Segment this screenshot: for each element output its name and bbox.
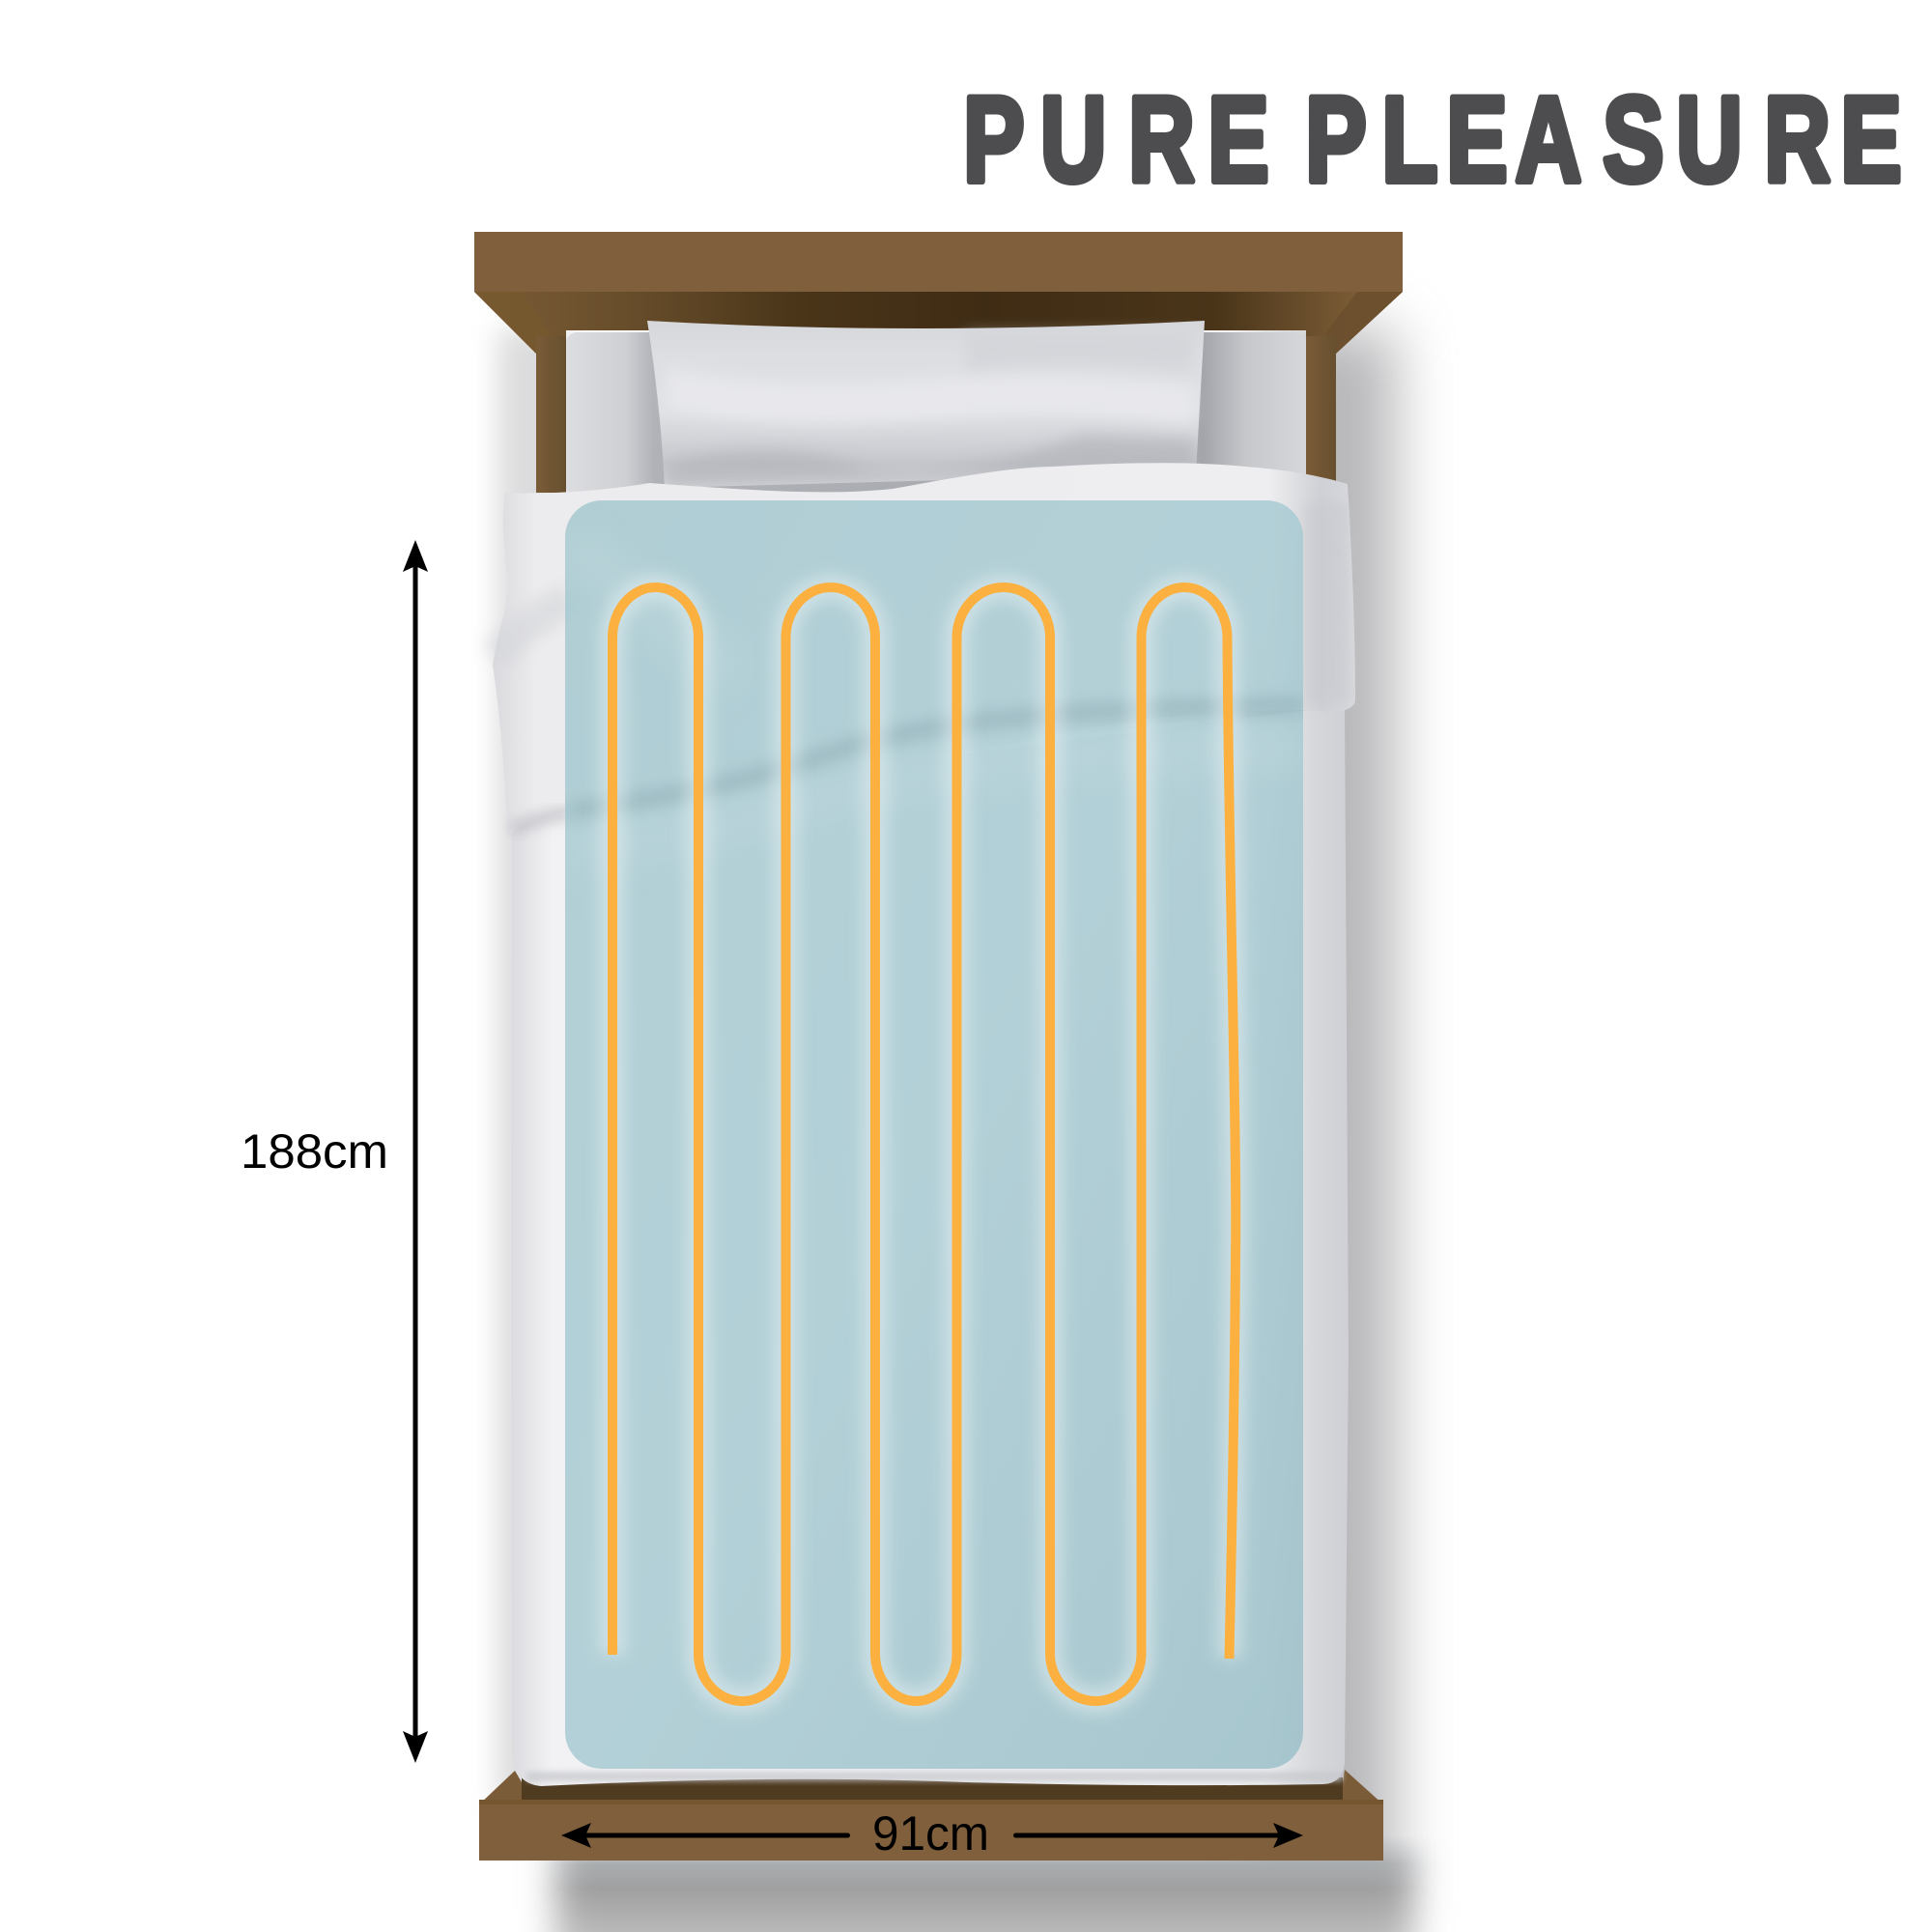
duvet fold [493, 463, 1355, 836]
duvet hem shading [526, 1772, 1343, 1781]
heated blanket panel [565, 500, 1303, 1769]
pillow [647, 321, 1205, 488]
panel wrinkles [565, 541, 1303, 1748]
mattress [566, 332, 1306, 497]
bed illustration [474, 232, 1410, 1932]
duvet body [511, 705, 1349, 1786]
bed shadow [497, 328, 1410, 1932]
height arrow [403, 540, 428, 1763]
title: PURE PLEASURE [963, 72, 1902, 208]
width arrow right [1013, 1823, 1303, 1848]
headboard [474, 232, 1403, 493]
height label: 188cm [241, 1124, 388, 1179]
width arrow left [561, 1823, 850, 1848]
footboard [479, 1770, 1383, 1861]
width label: 91cm [872, 1806, 989, 1861]
heating wire [612, 587, 1236, 1701]
heating wire glow [612, 587, 1236, 1701]
